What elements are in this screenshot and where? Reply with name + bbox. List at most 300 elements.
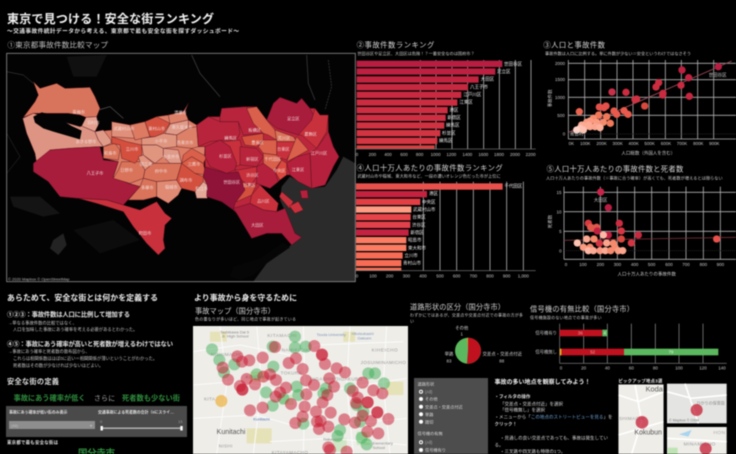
map place names: JOSUIMINAMICHO [361,360,406,365]
guide text: ・三叉路や四叉路も特徴の1つ。 [500,448,565,454]
y axis labels [547,61,566,136]
district: 台東区 [277,142,297,160]
row: no signal: 52 [590,350,596,355]
pie labels: 交差点・交差点付近 [482,350,523,357]
map: municipalities: 調布市 [180,177,192,183]
bar labels: 港区 [429,190,438,197]
row: with signal [535,330,607,337]
district: 世田谷区 [203,167,245,210]
scatter grid [564,187,736,259]
district: 三鷹市 [182,157,206,175]
x axis labels: 100K [580,141,591,146]
district: 清瀬市 [168,103,188,124]
map: municipalities: 中央区 [273,167,286,173]
axis labels: 80 [653,365,658,370]
bar labels: 杉並区 [442,129,456,136]
slider: 0 [100,419,103,424]
district: 稲城市 [157,180,182,203]
pie labels: その他 [455,324,469,332]
x axis labels: 0 [565,262,568,267]
map place names: School [373,445,385,450]
district: 中野区 [222,140,242,167]
safe town definition: さらに [94,394,115,402]
road shape heading: 道路形状の区分（国分寺市） [410,302,505,312]
title: 東京で見つける！安全な街ランキング [7,11,214,26]
district: 八王子市 [33,147,140,205]
base: Tama area [95,103,207,203]
safe town definition [14,394,180,402]
bar labels: 八王子市 [470,83,488,90]
district: 江戸川区 [310,132,339,188]
panel: accident map Kokubunji [193,292,408,454]
bar labels: 昭島市 [408,237,422,244]
district: 東村山市 [145,117,170,137]
district: 江東区 [287,153,312,188]
pie chart [455,338,481,364]
map place names: KITA [204,396,216,401]
definition heading: あらためて、安全な街とは何かを定義する [7,292,158,302]
filter panel: 事故にあう確率が低い街のみ表示 [9,410,67,414]
map place names: TOKURA [281,370,303,375]
y axis labels: 1000 [555,95,565,100]
y axis labels: 500 [557,113,565,118]
x axis: 800 [416,152,424,157]
y axis labels: 死者数 [547,214,554,228]
road/signal filter panel: (All) [425,389,433,394]
x axis: 200 [386,274,394,279]
panel: accident count ranking [355,41,536,157]
answer label: 東京都で最も安全な街は [7,439,59,446]
district: 西東京市 [177,127,198,148]
x axis: 400 [419,274,427,279]
row: no signal [535,349,718,356]
map place names: Kunitachi [253,416,270,421]
map: municipalities: 大田区 [251,221,264,227]
pie labels: 1 [460,332,463,336]
district: 東大和市 [130,122,150,140]
map: municipalities: 荒川区 [278,134,290,140]
map: municipalities: 豊島区 [251,139,264,145]
pickup map 3 [667,427,727,454]
bar labels: 江東区 [459,99,473,106]
map: municipalities: 羽村市 [87,119,100,125]
finding 2 [7,339,173,369]
map place names: Gakuen [357,336,371,341]
pickup map 3: MINAMICHO [684,442,716,448]
district: 大田区 [233,203,302,245]
y axis labels: 1500 [555,77,565,82]
map: municipalities: 東久留米市 [172,123,192,129]
guide text: ・フィルタの操作 [494,393,531,400]
map: municipalities: 八王子市 [87,169,103,175]
district: 練馬区 [197,117,240,147]
district: 西多摩 [23,113,103,163]
heading 2: ②事故件数ランキング [357,41,435,50]
x axis labels: 300 [614,262,622,267]
finding 1 [7,310,137,333]
pickup map 2 [667,384,727,423]
road/signal filter panel: 道路形状 [418,380,435,388]
map place names: Jr. High School [222,334,249,339]
axis labels: 100 [675,365,683,370]
road shape description: い [410,318,414,324]
map: municipalities: 国立市 [140,161,152,167]
guide text: クリック！ [494,420,517,427]
row: no signal: 信号機無し [535,349,557,356]
x axis: 100 [369,274,377,279]
pie labels [445,324,523,363]
x axis labels: 900 [717,262,725,267]
panel: per-capita accidents vs deaths scatter [546,165,736,278]
bar labels [403,183,523,267]
map: municipalities: 狛江市 [195,185,208,191]
safe town definition: 事故にあう確率が低く [14,394,86,402]
bar labels: 千代田区 [504,183,523,190]
panel: accidents per 100k ranking [355,163,536,279]
x axis labels: 500K [644,141,655,146]
bar labels: 足立区 [497,68,511,75]
district: 目黒区 [237,182,257,202]
reclaimed islands east [300,190,308,198]
panel: definition of safe town [6,292,187,454]
x axis: 200 [369,152,377,157]
y axis labels: 0 [563,131,566,136]
reclaimed islands [279,192,293,208]
map: municipalities: 昭島市 [104,149,117,155]
bar labels: 世田谷区 [504,60,522,67]
district: 武蔵野市 [182,148,207,163]
map: municipalities: あきる野市 [76,138,96,144]
road/signal filter panel: (All) [425,440,433,445]
map: municipalities: 江戸川区 [311,149,327,155]
x axis labels: 800K [693,141,704,146]
district: 昭島市 [103,143,120,160]
x axis labels: 900K [709,141,720,146]
district: 墨田区 [287,137,308,162]
district: 武蔵村山市 [112,122,135,138]
map: municipalities: 世田谷区 [223,178,240,184]
guide text: る。 [494,442,504,447]
x axis: 900 [503,274,511,279]
x axis labels: 400 [631,262,639,267]
map: municipalities: 立川市 [126,146,138,152]
zero line [568,133,736,135]
guide text: ・見通しの良い交差点であっても、事故は発生してい [500,434,608,441]
finding 1: ①②③：事故件数は人口に比例して増加する [7,310,130,318]
road/signal filter panel: 交差点・交差点付近 [425,403,464,410]
district: 中央区 [275,160,287,180]
district: 福生市 [95,130,111,147]
bar labels: 立川市 [404,252,418,259]
map place names: Tsuda University [317,332,346,337]
x axis: 800 [486,274,494,279]
heading 4: ④人口十万人あたりの事故件数ランキング [357,163,503,172]
map place names: Tachikawa Dai 9 [220,329,250,334]
guide text: 「信号機無し」を選択 [500,406,545,413]
x axis labels: 400K [628,141,639,146]
red accident points [217,340,394,454]
orange accident point [215,395,227,407]
x axis labels: 600 [665,262,673,267]
road/signal filter panel: その他 [425,396,438,403]
map attribution: © 2020 Mapbox © OpenStreetMap [8,276,70,281]
map place names: KOIGAKUBO [246,375,277,380]
district: 狛江市 [195,182,207,198]
x axis: 1800 [494,152,504,157]
bar labels: 大田区 [481,76,495,83]
finding 1: →単なる事故件数の比較ではなく、 [8,320,77,326]
bar labels: 武蔵村山市 [413,206,436,213]
map labels: 青梅市 [72,109,85,115]
district: 青梅市 [23,82,100,117]
description 2: 世田谷区や足立区、大田区は危険！？一番安全なのは国府市？ [357,50,475,56]
grid [420,60,531,149]
road shape description: わずかにではあるが、交差点や交差点付近での事故の方が多 [410,312,523,318]
district: 府中市 [143,163,182,182]
district: 立川市 [112,137,142,163]
row: with signal: 36 [578,331,583,336]
map place names: HIGASHIKOIGAKUBO [310,376,362,381]
scatter points [574,188,720,254]
map: municipalities: 日野市 [120,166,133,172]
zero line [564,250,736,252]
district: 調布市 [177,163,203,192]
trend line [568,61,732,132]
map heading: 事故マップ（国分寺市） [195,306,275,316]
filter panel: ▾ [90,423,92,428]
bar labels: 港区 [449,106,459,113]
bar labels: 渋谷区 [412,221,426,228]
road/signal filter panel [414,378,488,454]
x axis labels: 0K [569,141,574,146]
map heading: ①東京都事故件数比較マップ [7,39,108,49]
map place names: NISHIMACHI [211,352,241,357]
map place names: NISHI [219,443,233,448]
map place names: KIHEICHO [372,348,398,353]
road shape description [410,312,523,324]
guide heading: 事故の多い地点を観察してみよう！ [494,378,590,386]
y axis labels: 15 [556,190,562,195]
map: municipalities: 足立区 [287,115,300,121]
district: 千代田区 [263,153,282,172]
x axis labels: 200K [596,141,607,146]
scatter label: 大田区 [594,196,608,203]
y axis labels: 2000 [555,61,565,66]
y axis labels: 事故件数 [547,89,554,107]
row: with signal: 信号機有り [535,330,557,337]
x axis labels [565,262,725,278]
map: municipalities: 千代田区 [264,156,281,162]
panel: population vs accidents scatter [543,40,736,157]
guide text: ・メニューから「この地点のストリートビューを見る」を [494,414,612,421]
map place names: KITAMACHI [267,333,297,338]
bar labels: 新宿区 [410,229,424,236]
finding 2: ④⑤：事故にあう確率が高いと死者数が増えるわけではない [7,339,173,348]
map: municipalities: 武蔵村山市 [114,125,134,131]
roads [193,325,407,454]
x axis labels: 500 [648,262,656,267]
map: municipalities: 目黒区 [243,183,256,188]
parks [280,395,370,452]
bar labels: 中央区 [422,198,436,205]
signal description: 信号機施設のない地点での事故が多い [530,314,602,320]
x axis: 700 [470,274,478,279]
street map [193,325,408,454]
pickup map 1: Kokubun [634,429,662,436]
panel: Tokyo accident map [7,39,355,282]
x axis: 600 [400,152,408,157]
x axis: 2000 [510,152,520,157]
pickup heading: ピックアップ地点3選 [618,377,663,384]
description 5: 人口十万人あたりの事故件数（＝事故に合う確率）が高くても、死者数が増えるとは限らない [546,174,723,180]
district: 小平市 [142,133,177,148]
x axis labels: 人口十万人あたりの事故件数 [618,271,676,278]
district: 国分寺市 [142,145,163,163]
road/signal filter panel: 踏切 [425,418,433,425]
bar chart [356,183,503,274]
filter panel [6,406,187,437]
filter panel: 15 [178,419,183,424]
map: municipalities [23,82,339,255]
x axis [355,270,536,279]
section heading: より事故から身を守るために [194,292,297,302]
x axis: 1400 [462,152,473,157]
pickup map 1: Koda [646,385,664,394]
grid [423,182,523,271]
pie labels: 88 [499,358,505,363]
panel: road shape pie [410,302,523,454]
district: 荒川区 [275,130,297,142]
y axis labels: 10 [556,209,562,214]
map place names: Hitotsubashi [352,331,374,336]
axis labels: 120 [699,365,707,370]
district: 杉並区 [205,140,237,173]
heading 5: ⑤人口十万人あたりの事故件数と死者数 [547,165,684,174]
axis labels: 0 [560,365,563,370]
scatter labels: 世田谷区 [709,71,727,78]
filter panel: (All) [11,423,19,428]
pickup map 1 [618,384,664,454]
map: municipalities: 練馬区 [224,134,237,140]
x axis: 2200 [526,152,536,157]
bar labels [439,60,522,144]
base: special wards [197,97,339,245]
x axis labels: 100 [579,262,587,267]
row: no signal: 79 [669,350,674,355]
district: 町田市 [78,198,172,255]
scatter points [573,63,722,134]
district: 港区 [257,163,278,188]
map place names: Kunitachi [217,429,246,436]
district: 豊島区 [242,133,263,147]
map place names: NAMIKICHO [282,348,311,353]
map blocks [210,332,403,443]
x axis labels: 300K [612,141,623,146]
x axis labels: 700 [682,262,690,267]
finding 2: →事故にあう確率と死者数の散布図から、 [8,348,90,355]
district: 国立市 [138,155,153,170]
scatter grid [568,60,736,139]
x axis: 300 [403,274,411,279]
finding 1: 人口を加味した事故にあう確率を考える必要があるとわかった。 [13,326,137,333]
pickup map 2: ひかりの保育園 [697,399,725,405]
district: 日野市 [113,162,145,183]
pie labels: 単路 [445,350,454,357]
bar labels: 台東区 [412,214,426,221]
x axis labels [569,141,720,157]
y axis labels: 0 [559,248,562,253]
district: 渋谷区 [235,167,257,187]
map place names [204,329,406,454]
district: 羽村市 [82,117,98,132]
map: municipalities: 杉並区 [219,153,232,159]
x axis [355,149,536,157]
district: 品川区 [250,185,278,212]
guide text [494,393,612,454]
bar chart [357,61,502,152]
district: 北区 [247,107,277,140]
map: municipalities: 小金井市 [163,153,179,159]
district: 足立区 [267,97,315,135]
road/signal filter panel: 信号機の有無 [418,430,443,437]
x axis labels: 200 [597,262,605,267]
finding 2: これらは相関係数はほぼ0に近い＝相関関係が薄いということがわかった。 [13,355,157,362]
x axis labels: 600K [661,141,671,146]
map place names: Nakayoshi [323,436,342,441]
road/signal filter panel: 信号機有り [425,447,446,454]
map border [7,53,355,282]
bar labels: 練馬区 [446,122,460,129]
bar labels: 新宿区 [447,114,461,121]
district: 板橋区 [220,107,263,135]
map: municipalities: 東村山市 [148,125,165,131]
bar labels: 青村山市 [403,260,421,267]
x axis: 1,000 [518,274,529,279]
map: municipalities: 小平市 [155,138,167,144]
district: 文京区 [258,140,277,155]
map: municipalities: 台東区 [277,145,290,151]
signal heading: 信号機の有無比較（国分寺市） [530,304,634,313]
map: municipalities: 府中市 [155,168,167,174]
bar labels: 江戸川区 [463,91,482,98]
description 3: 事故件数は人口に比例する。単に件数が少ない＝安全というわけではなさそう [545,50,691,56]
map: municipalities: 渋谷区 [246,171,259,177]
district: 多摩市 [128,178,157,200]
map description: 色の重なりが多いほど、同じ地点で事故が起きている [195,316,296,322]
pie labels: 83 [447,358,452,363]
panel: signal comparison [530,304,727,454]
map: municipalities: 葛飾区 [304,131,317,137]
district: 東久留米市 [165,120,188,135]
panel: observation guide [494,378,612,454]
x axis labels: 人口総数（外国人を含む） [621,150,675,157]
lowest label: 青島村 [570,130,584,137]
map: municipalities: 町田市 [139,229,151,235]
reclaimed islands south [289,201,303,213]
axis labels: 20 [581,365,587,370]
x axis labels: 700K [677,141,687,146]
green accident points [206,331,390,450]
y axis labels [547,190,562,253]
chart grid [560,324,727,363]
map: municipalities: 多摩市 [141,184,154,190]
axis labels [560,365,726,370]
map: municipalities: 稲城市 [165,183,178,189]
row: with signal: 4 [603,331,606,336]
axis labels: 40 [605,365,610,370]
x axis: 500 [436,274,444,279]
map background [7,53,355,282]
